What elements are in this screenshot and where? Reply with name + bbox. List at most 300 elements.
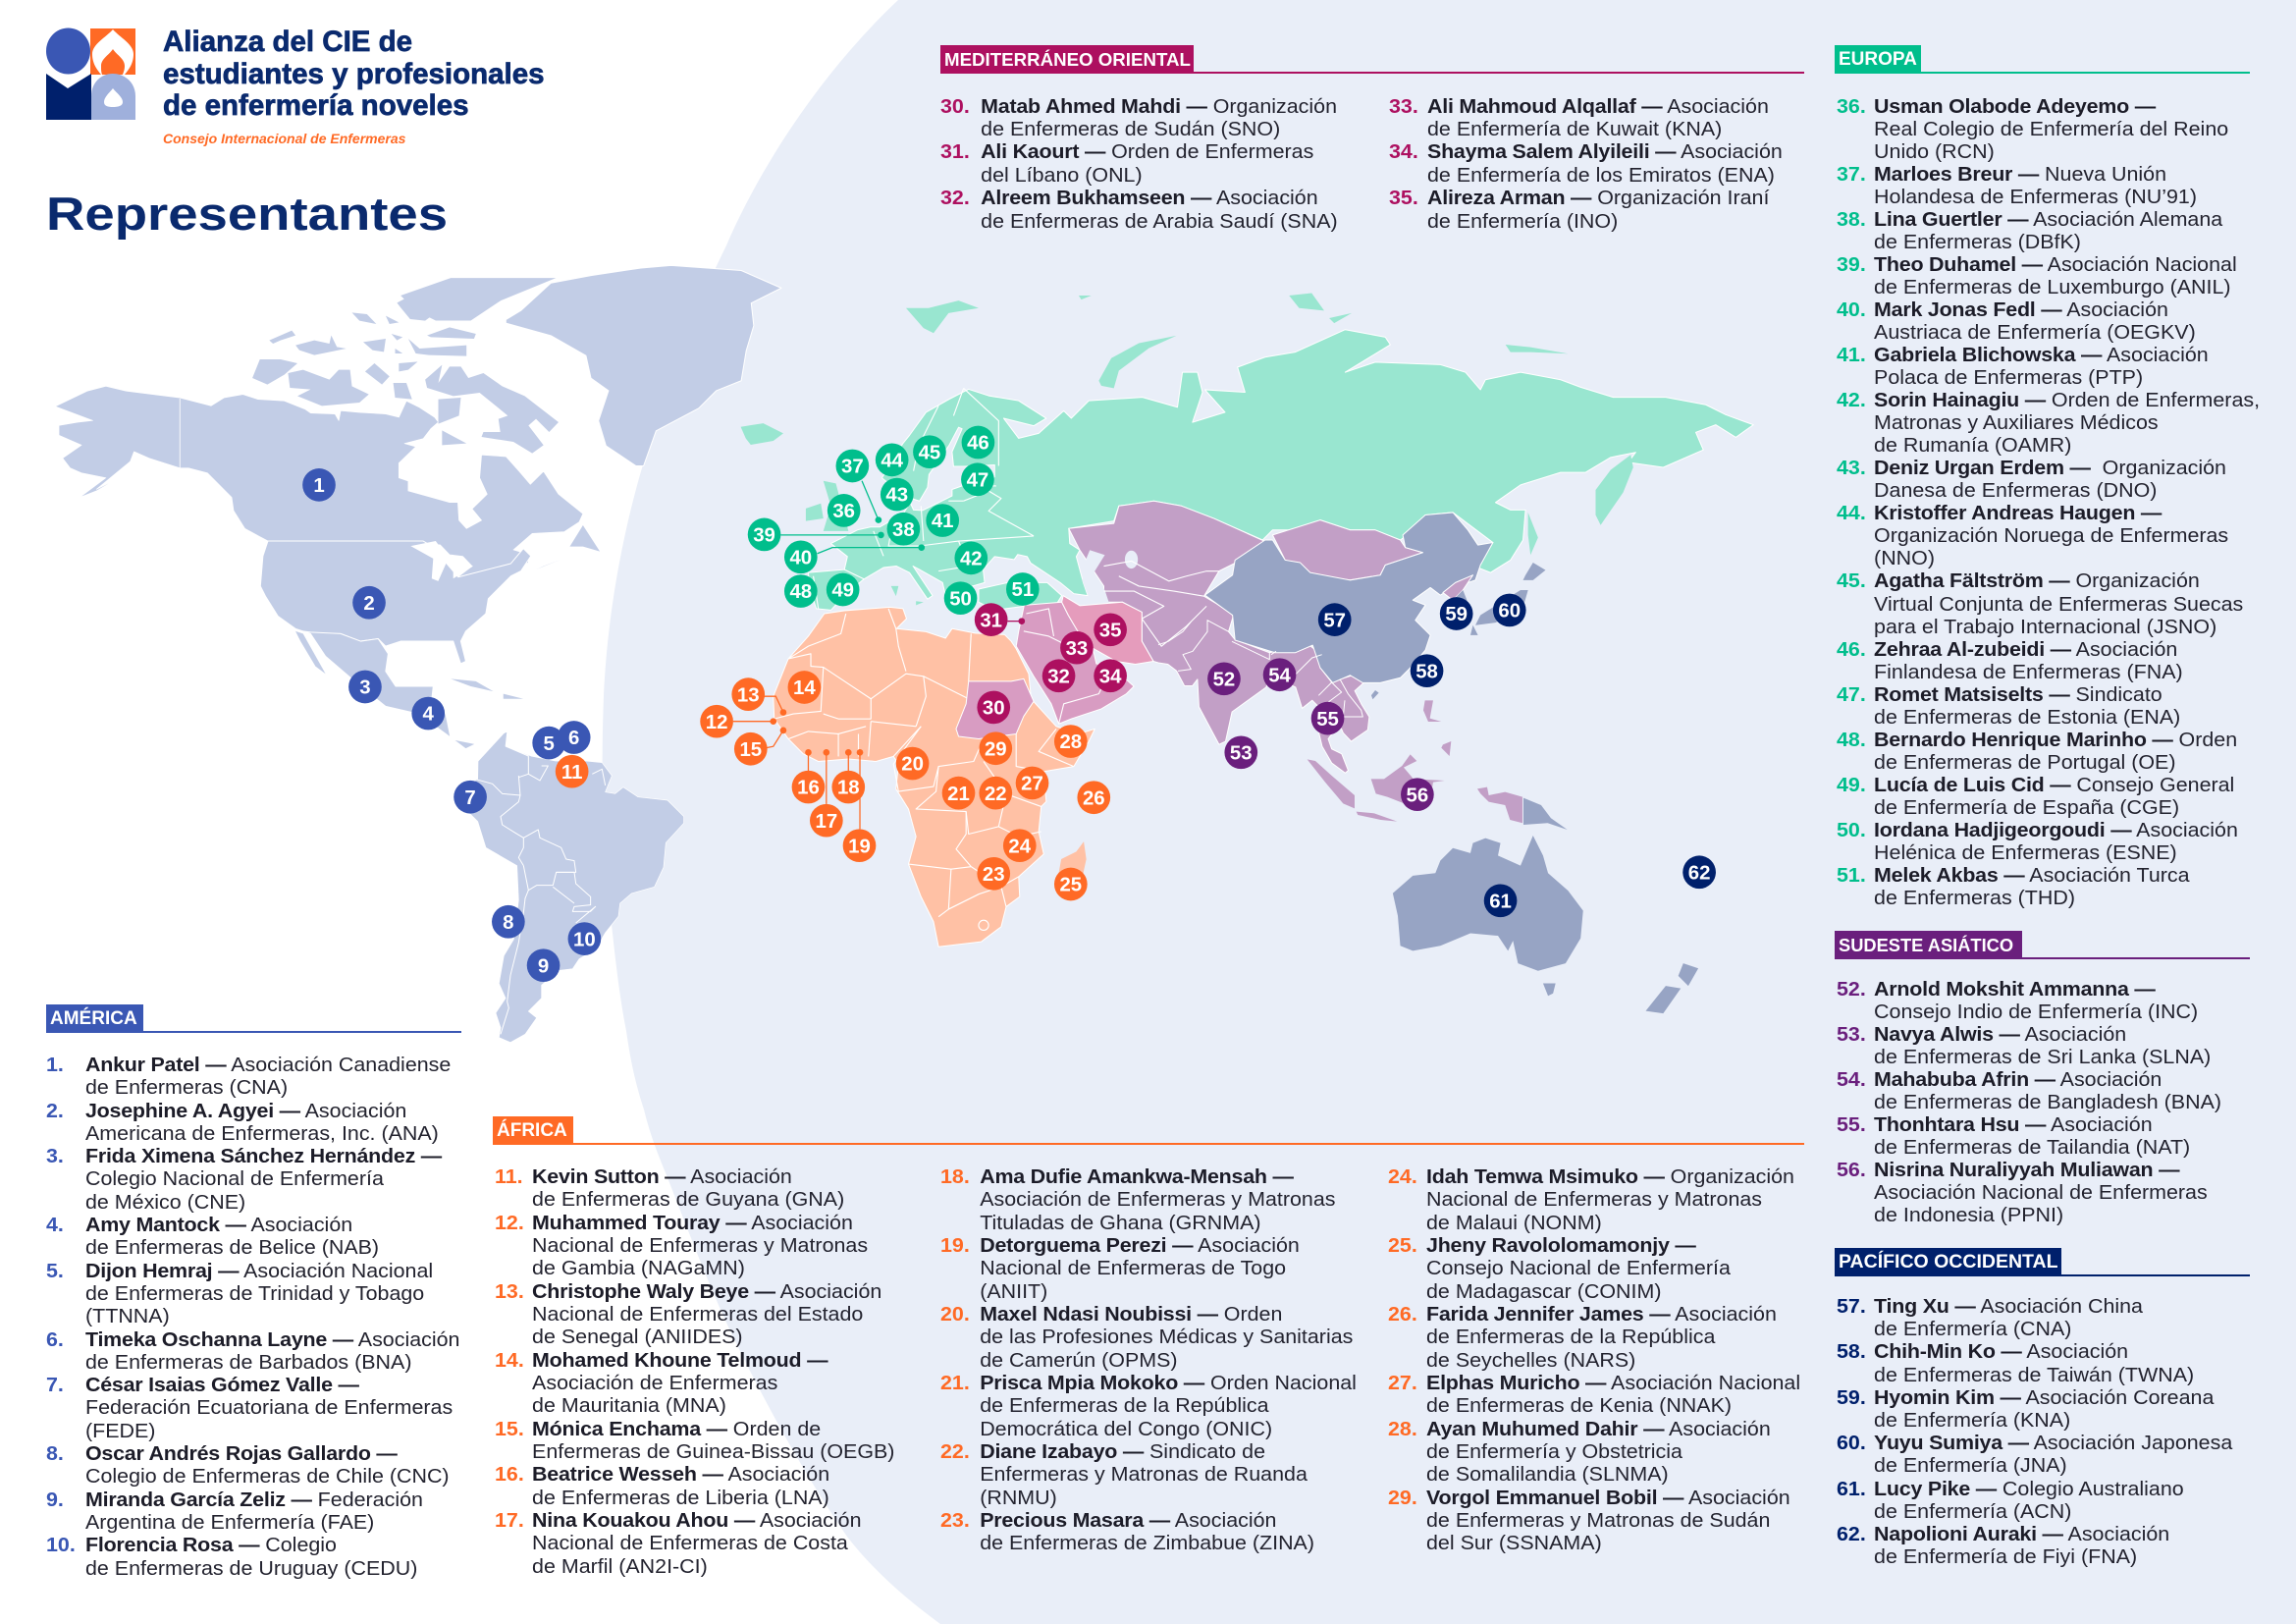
entry 25: Jheny Ravololomamonjy —: [1426, 1235, 1696, 1257]
entry 50: 50.: [1837, 820, 1866, 841]
entry 16: de Enfermeras de Liberia (LNA): [532, 1488, 829, 1509]
entry 39: 39.: [1837, 254, 1866, 276]
entry 43: Deniz Urgan Erdem — Organización: [1874, 458, 2226, 479]
entry 18: Asociación de Enfermeras y Matronas: [980, 1189, 1335, 1211]
Mexico and Central America: [303, 631, 476, 749]
entry 19: Detorguema Perezi — Asociación: [980, 1235, 1300, 1257]
entry 26: de Seychelles (NARS): [1426, 1350, 1635, 1372]
entry 26: [1388, 1304, 1777, 1372]
entry 50: Helénica de Enfermeras (ESNE): [1874, 842, 2177, 864]
marker 61: [1484, 885, 1517, 917]
marker 19: [843, 829, 876, 862]
entry 22: Enfermeras y Matronas de Ruanda: [980, 1464, 1308, 1486]
Iran: [1062, 596, 1153, 665]
entry 33: de Enfermería de Kuwait (KNA): [1427, 119, 1722, 140]
entry 48: 48.: [1837, 730, 1866, 751]
South Asian borders: [1158, 621, 1362, 717]
entry 53: 53.: [1837, 1024, 1866, 1046]
entry 38: 38.: [1837, 209, 1866, 231]
marker 58: 58: [1415, 661, 1438, 682]
entry 62: 62.: [1837, 1524, 1866, 1545]
entry 22: [940, 1441, 1308, 1509]
entry 23: Precious Masara — Asociación: [980, 1510, 1276, 1532]
entry 14: 14.: [495, 1350, 524, 1372]
marker 36: [828, 494, 861, 527]
entry 16: 16.: [495, 1464, 524, 1486]
entry 28: [1388, 1419, 1771, 1486]
list: Mediterráneo column 1: [940, 96, 1338, 233]
entry 52: Arnold Mokshit Ammanna —: [1874, 978, 2156, 1000]
entry 47: [1837, 684, 2260, 730]
Africa: [774, 607, 1095, 947]
entry 57: 57.: [1837, 1296, 1866, 1318]
marker 50: 50: [949, 588, 972, 610]
entry 41: [1837, 345, 2260, 390]
marker 51: 51: [1011, 579, 1034, 601]
entry 62: de Enfermería de Fiyi (FNA): [1874, 1546, 2137, 1568]
entry 58: Chih-Min Ko — Asociación: [1874, 1341, 2128, 1363]
marker 53: 53: [1230, 742, 1253, 764]
marker 10: 10: [573, 929, 596, 950]
marker 57: [1318, 603, 1352, 636]
entry 19: Nacional de Enfermeras de Togo: [980, 1258, 1286, 1279]
entry 19: 19.: [940, 1235, 970, 1257]
map: East Asia and Oceania: [1205, 513, 1698, 1013]
entry 40: Austriaca de Enfermería (OEGKV): [1874, 322, 2196, 344]
marker 1: 1: [313, 475, 325, 497]
marker 35: 35: [1099, 620, 1121, 641]
marker 45: [913, 435, 946, 468]
entry 39: Theo Duhamel — Asociación Nacional: [1874, 254, 2237, 276]
marker 42: [954, 542, 988, 574]
marker 12: [700, 705, 733, 738]
marker 5: 5: [544, 733, 555, 755]
map: Europe, Africa, Asia: [741, 293, 1753, 947]
marker 1: [302, 468, 336, 502]
entry 17: 17.: [495, 1510, 524, 1532]
Canadian Arctic islands: [252, 293, 600, 569]
marker 46: [962, 426, 994, 459]
entry 17: de Marfil (AN2I-CI): [532, 1556, 708, 1578]
entry 8: Oscar Andrés Rojas Gallardo —: [85, 1443, 398, 1465]
entry 5: (TTNNA): [85, 1306, 170, 1327]
entry 54: 54.: [1837, 1069, 1866, 1091]
Lebanon connector: [1008, 619, 1025, 624]
Papua New Guinea: [1523, 798, 1568, 830]
entry 12: 12.: [495, 1213, 524, 1234]
entry 62: [1837, 1524, 2232, 1569]
Europe and Russia: [808, 330, 1753, 610]
background lobe: [603, 0, 2296, 1624]
marker 23: [977, 857, 1010, 891]
entry 25: 25.: [1388, 1235, 1417, 1257]
marker 9: 9: [538, 955, 549, 977]
marker 30: 30: [983, 698, 1005, 720]
entry 13: de Senegal (ANIIDES): [532, 1326, 743, 1348]
entry 55: 55.: [1837, 1114, 1866, 1136]
entry 54: Mahabuba Afrin — Asociación: [1874, 1069, 2162, 1091]
entry 29: 29.: [1388, 1488, 1417, 1509]
entry 31: Ali Kaourt — Orden de Enfermeras: [981, 141, 1313, 163]
heading: África: [493, 1116, 573, 1144]
entry 2: Americana de Enfermeras, Inc. (ANA): [85, 1123, 439, 1145]
entry 17: [495, 1510, 862, 1578]
entry 37: Marloes Breur — Nueva Unión: [1874, 164, 2166, 186]
entry 62: Napolioni Auraki — Asociación: [1874, 1524, 2169, 1545]
marker 26: 26: [1083, 787, 1105, 809]
entry 61: 61.: [1837, 1479, 1866, 1500]
Canada and Alaska mainland: [55, 386, 583, 577]
marker 49: [827, 573, 860, 606]
marker 15: [734, 732, 768, 766]
marker 37: [836, 450, 869, 482]
marker 44: [876, 444, 909, 476]
entry 43: Danesa de Enfermeras (DNO): [1874, 480, 2157, 502]
marker 52: 52: [1213, 669, 1235, 690]
Great Britain: [824, 481, 848, 531]
list: África column 2: [940, 1166, 1357, 1554]
entry 27: [1388, 1373, 1800, 1417]
entry 17: Nina Kouakou Ahou — Asociación: [532, 1510, 862, 1532]
South America landmass: [454, 731, 684, 1043]
marker 56: [1401, 778, 1434, 811]
marker 6: [558, 721, 591, 754]
marker 26: [1077, 781, 1110, 814]
entry 56: Nisrina Nuraliyyah Muliawan —: [1874, 1160, 2179, 1181]
marker 15: 15: [739, 739, 762, 761]
entry 11: Kevin Sutton — Asociación: [532, 1166, 792, 1188]
entry 5: [46, 1261, 433, 1327]
organization name: [163, 26, 545, 122]
entry 1: 1.: [46, 1055, 64, 1076]
entry 37: Holandesa de Enfermeras (NU’91): [1874, 187, 2197, 208]
entry 12: [495, 1213, 868, 1279]
heading: África: ÁFRICA: [497, 1120, 567, 1141]
entry 19: [940, 1235, 1300, 1303]
Indonesia, Philippines and West New Guinea: [1308, 700, 1522, 823]
Greenland: [506, 265, 781, 465]
entry 36: Usman Olabode Adeyemo —: [1874, 96, 2156, 118]
marker 12: 12: [706, 712, 727, 733]
marker 43: 43: [885, 485, 908, 507]
entry 49: Lucía de Luis Cid — Consejo General: [1874, 775, 2234, 796]
entry 18: Ama Dufie Amankwa-Mensah —: [980, 1166, 1294, 1188]
marker 10: [568, 922, 601, 955]
marker 57: 57: [1323, 610, 1346, 631]
entry 53: de Enfermeras de Sri Lanka (SLNA): [1874, 1047, 2211, 1068]
entry 7: [46, 1375, 453, 1442]
heading: América: AMÉRICA: [50, 1008, 137, 1029]
entry 60: [1837, 1433, 2232, 1479]
Africa connectors: [733, 696, 863, 829]
entry 18: Tituladas de Ghana (GRNMA): [980, 1213, 1261, 1234]
entry 45: Virtual Conjunta de Enfermeras Suecas: [1874, 594, 2243, 616]
entry 36: [1837, 96, 2260, 164]
panel: Mediterráneo Oriental: [940, 45, 1804, 233]
entry 51: [1837, 865, 2260, 910]
Iceland: [741, 423, 783, 445]
entry 58: 58.: [1837, 1341, 1866, 1363]
Svalbard and Arctic islands: [906, 293, 1568, 388]
Great Lakes: [410, 541, 473, 581]
entry 31: [940, 141, 1338, 188]
entry 15: Enfermeras de Guinea-Bissau (OEGB): [532, 1441, 894, 1463]
entry 53: Navya Alwis — Asociación: [1874, 1024, 2126, 1046]
marker 46: 46: [967, 433, 989, 455]
entry 22: (RNMU): [980, 1488, 1057, 1509]
entry 22: 22.: [940, 1441, 970, 1463]
marker 24: [1003, 829, 1037, 862]
entry 32: [940, 188, 1338, 234]
marker 55: [1311, 702, 1344, 734]
marker 54: 54: [1268, 665, 1292, 686]
marker 25: [1054, 868, 1088, 900]
entry 8: [46, 1443, 450, 1488]
entry 48: de Enfermeras de Portugal (OE): [1874, 752, 2176, 774]
marker 9: [527, 948, 560, 982]
entry 6: 6.: [46, 1329, 64, 1351]
organization name: estudiantes y profesionales: [163, 57, 545, 90]
marker 44: 44: [881, 451, 904, 472]
entry 42: Sorin Hainagiu — Orden de Enfermeras,: [1874, 390, 2260, 411]
entry 3: 3.: [46, 1146, 64, 1167]
marker 25: 25: [1059, 875, 1082, 896]
entry 46: 46.: [1837, 639, 1866, 661]
markers: América: [302, 468, 601, 982]
list: África column 3: [1388, 1166, 1800, 1554]
entry 31: del Líbano (ONL): [981, 165, 1143, 187]
entry 12: de Gambia (NAGaMN): [532, 1258, 745, 1279]
entry 44: [1837, 503, 2260, 570]
marker 59: 59: [1445, 604, 1468, 625]
entry 35: de Enfermería (INO): [1427, 211, 1618, 233]
entry 7: César Isaias Gómez Valle —: [85, 1375, 359, 1396]
marker 61: 61: [1489, 891, 1512, 912]
entry 4: [46, 1215, 379, 1259]
marker 11: 11: [561, 762, 582, 784]
entry 7: (FEDE): [85, 1421, 155, 1442]
entry 30: [940, 96, 1337, 140]
marker 13: [731, 677, 765, 711]
marker 39: 39: [753, 525, 775, 547]
Middle East and Central Asian borders: [1024, 561, 1219, 724]
European borders: [814, 388, 1034, 609]
entry 50: [1837, 820, 2260, 865]
entry 27: de Enfermeras de Kenia (NNAK): [1426, 1395, 1732, 1417]
marker 60: [1493, 594, 1526, 626]
entry 44: 44.: [1837, 503, 1866, 524]
panel: América: [46, 1004, 461, 1580]
Caspian and Aral seas: [1083, 550, 1138, 605]
panel: Sudeste Asiático: [1835, 931, 2250, 1230]
entry 51: Melek Akbas — Asociación Turca: [1874, 865, 2190, 887]
entry 24: Nacional de Enfermeras y Matronas: [1426, 1189, 1762, 1211]
marker 54: [1263, 658, 1296, 691]
North Korea: [1443, 575, 1473, 600]
map: USA, Central America, Greenland: [260, 265, 781, 749]
entry 49: de Enfermería de España (CGE): [1874, 797, 2179, 819]
marker 3: [348, 671, 382, 703]
South American borders: [474, 746, 606, 1034]
marker 50: [944, 581, 977, 615]
entry 23: 23.: [940, 1510, 970, 1532]
entry 54: [1837, 1069, 2221, 1114]
entry 37: 37.: [1837, 164, 1866, 186]
entry 51: de Enfermeras (THD): [1874, 888, 2075, 909]
marker 32: 32: [1047, 666, 1070, 687]
marker 39: [748, 518, 780, 551]
organization name: Alianza del CIE de: [163, 26, 412, 58]
marker 60: 60: [1498, 601, 1521, 623]
marker 21: 21: [947, 784, 970, 805]
entry 10: [46, 1535, 417, 1580]
marker 22: 22: [985, 784, 1007, 805]
marker 20: 20: [901, 754, 924, 776]
entry 1: [46, 1055, 451, 1099]
map: South and Southeast Asia details: [1158, 621, 1568, 830]
entry 55: Thonhtara Hsu — Asociación: [1874, 1114, 2153, 1136]
entry 24: Idah Temwa Msimuko — Organización: [1426, 1166, 1794, 1188]
marker 7: [454, 781, 487, 814]
entry 20: de Camerún (OPMS): [980, 1350, 1178, 1372]
entry 39: [1837, 254, 2260, 299]
marker 62: [1682, 855, 1716, 889]
marker 16: 16: [797, 778, 820, 799]
entry 61: Lucy Pike — Colegio Australiano: [1874, 1479, 2184, 1500]
marker 51: [1006, 572, 1040, 606]
entry 59: Hyomin Kim — Asociación Coreana: [1874, 1387, 2214, 1409]
marker 27: 27: [1021, 774, 1043, 795]
entry 52: [1837, 978, 2221, 1024]
entry 48: Bernardo Henrique Marinho — Orden: [1874, 730, 2237, 751]
entry 36: 36.: [1837, 96, 1866, 118]
entry 30: 30.: [940, 96, 970, 118]
heading: Pacífico Occidental: PACÍFICO OCCIDENTAL: [1839, 1251, 2058, 1272]
Kamchatka and Sakhalin: [1528, 455, 1633, 555]
entry 53: [1837, 1024, 2221, 1069]
entry 52: Consejo Indio de Enfermería (INC): [1874, 1001, 2198, 1023]
Arabian Peninsula and Iraq: [1016, 602, 1134, 724]
marker 2: [352, 586, 386, 620]
entry 5: Dijon Hemraj — Asociación Nacional: [85, 1261, 433, 1282]
entry 9: Miranda García Zeliz — Federación: [85, 1489, 423, 1511]
marker 31: [975, 603, 1008, 636]
entry 22: Diane Izabayo — Sindicato de: [980, 1441, 1265, 1463]
entry 14: Asociación de Enfermeras: [532, 1373, 777, 1394]
Madagascar: [1056, 841, 1087, 896]
marker 6: 6: [568, 728, 579, 749]
entry 60: Yuyu Sumiya — Asociación Japonesa: [1874, 1433, 2232, 1454]
entry 3: [46, 1146, 442, 1214]
marker 41: 41: [932, 511, 954, 532]
entry 2: Josephine A. Agyei — Asociación: [85, 1101, 406, 1122]
marker 52: [1207, 662, 1241, 695]
logo: [46, 27, 135, 120]
entry 15: Mónica Enchama — Orden de: [532, 1419, 821, 1440]
entry 38: [1837, 209, 2260, 254]
entry 44: Kristoffer Andreas Haugen —: [1874, 503, 2162, 524]
entry 57: Ting Xu — Asociación China: [1874, 1296, 2143, 1318]
heading: Mediterráneo Oriental: MEDITERRÁNEO ORIENTAL: [944, 49, 1191, 70]
entry 46: [1837, 639, 2260, 684]
marker 22: [979, 777, 1012, 809]
Japan: [1470, 563, 1545, 635]
entry 5: 5.: [46, 1261, 64, 1282]
marker 13: 13: [737, 684, 760, 706]
marker 56: 56: [1407, 785, 1428, 806]
marker 28: [1054, 725, 1088, 758]
entry 28: de Enfermería y Obstetricia: [1426, 1441, 1682, 1463]
marker 47: [961, 462, 994, 496]
entry 12: Muhammed Touray — Asociación: [532, 1213, 853, 1234]
entry 10: 10.: [46, 1535, 76, 1556]
entry 32: 32.: [940, 188, 970, 209]
entry 43: [1837, 458, 2260, 503]
marker 5: [532, 727, 565, 759]
entry 49: 49.: [1837, 775, 1866, 796]
marker 4: [411, 697, 445, 730]
entry 2: 2.: [46, 1101, 64, 1122]
entry 56: de Indonesia (PPNI): [1874, 1205, 2063, 1226]
marker 34: [1094, 659, 1127, 692]
entry 56: 56.: [1837, 1160, 1866, 1181]
entry 25: de Madagascar (CONIM): [1426, 1281, 1662, 1303]
marker 24: 24: [1008, 836, 1032, 857]
marker 33: [1060, 631, 1094, 665]
entry 55: de Enfermeras de Tailandia (NAT): [1874, 1137, 2190, 1159]
marker 29: 29: [985, 738, 1007, 760]
entry 59: [1837, 1387, 2232, 1433]
entry 29: de Enfermeras y Matronas de Sudán: [1426, 1510, 1770, 1532]
entry 45: 45.: [1837, 570, 1866, 592]
marker 62: 62: [1688, 862, 1710, 884]
entry 33: 33.: [1389, 96, 1418, 118]
entry 47: Romet Matsiselts — Sindicato: [1874, 684, 2163, 706]
entry 29: [1388, 1488, 1790, 1554]
heading: Sudeste Asiático: [1835, 931, 2022, 958]
entry 28: 28.: [1388, 1419, 1417, 1440]
entry 16: [495, 1464, 829, 1509]
Tasmania: [1543, 984, 1556, 996]
marker 40: 40: [789, 547, 812, 568]
entry 40: 40.: [1837, 299, 1866, 321]
entry 29: Vorgol Emmanuel Bobil — Asociación: [1426, 1488, 1790, 1509]
entry 18: 18.: [940, 1166, 970, 1188]
entry 24: de Malaui (NONM): [1426, 1213, 1602, 1234]
Caribbean islands: [451, 678, 523, 699]
marker 37: 37: [841, 457, 864, 478]
entry 47: 47.: [1837, 684, 1866, 706]
marker 27: [1016, 767, 1048, 799]
marker 32: [1042, 659, 1075, 692]
organization subtitle: Consejo Internacional de Enfermeras: [163, 131, 405, 146]
entry 58: de Enfermeras de Taiwán (TWNA): [1874, 1365, 2194, 1386]
entry 56: [1837, 1160, 2221, 1228]
entry 10: Florencia Rosa — Colegio: [85, 1535, 337, 1556]
entry 21: de Enfermeras de la República: [980, 1395, 1269, 1417]
China: [1205, 513, 1493, 682]
marker 18: 18: [837, 778, 860, 799]
entry 34: Shayma Salem Alyileili — Asociación: [1427, 141, 1783, 163]
marker 16: [792, 771, 825, 803]
entry 13: Christophe Waly Beye — Asociación: [532, 1281, 881, 1303]
marker 31: 31: [980, 610, 1002, 631]
entry 20: de las Profesiones Médicas y Sanitarias: [980, 1326, 1353, 1348]
marker 34: 34: [1099, 666, 1122, 687]
marker 47: 47: [967, 469, 988, 491]
entry 34: [1389, 141, 1783, 188]
entry 32: Alreem Bukhamseen — Asociación: [981, 188, 1318, 209]
